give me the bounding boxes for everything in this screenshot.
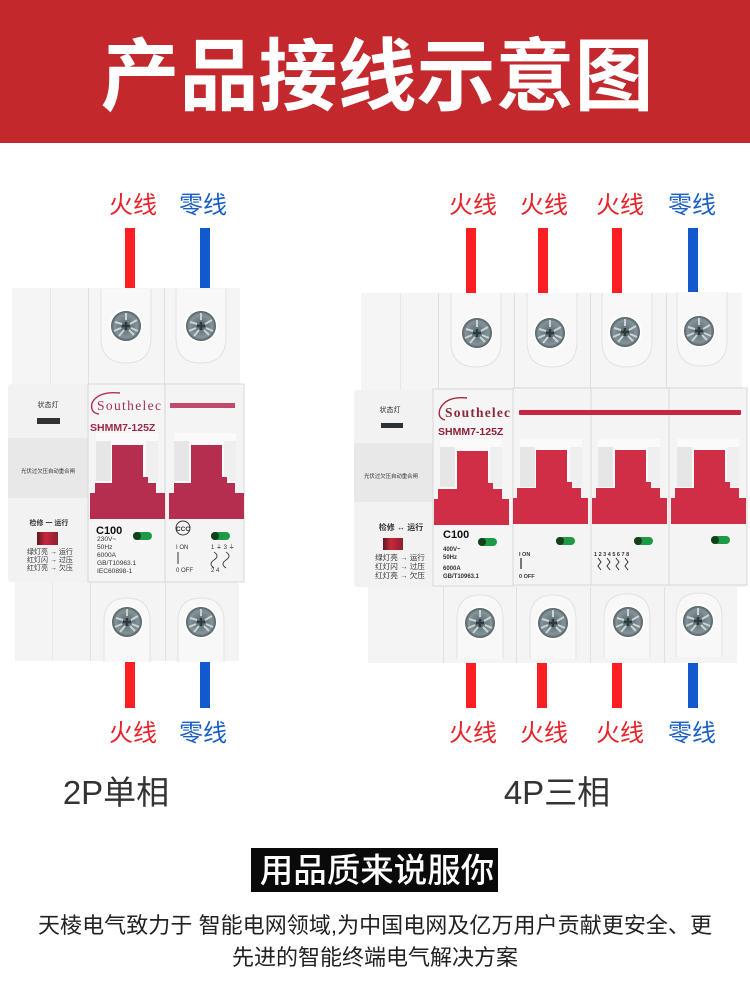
- module labels: 红灯闪 → 过压: [27, 555, 73, 564]
- module labels: 检修 一 运行: [30, 518, 68, 527]
- module labels: 1 2 3 4 5 6 7 8: [594, 552, 629, 558]
- toggle handles: [434, 450, 746, 525]
- screws: [109, 309, 218, 639]
- toggle handles: [90, 445, 244, 519]
- wires top: [125, 228, 698, 294]
- module labels: 光伏过欠压自动重合闸: [21, 467, 75, 475]
- module labels: [21, 400, 235, 575]
- module labels: 230V~: [97, 536, 116, 543]
- module labels: 检修 ↔ 运行: [379, 522, 423, 532]
- module labels: 2 4: [211, 568, 220, 574]
- wire labels top 2P: [109, 192, 227, 219]
- module labels: CCC: [176, 526, 190, 533]
- Southelec logo: [438, 398, 510, 438]
- wire labels bottom 2P: [109, 720, 227, 747]
- caption 2P: 2P单相: [63, 774, 169, 811]
- Southelec logo: [90, 393, 161, 434]
- wire labels top 4P: [449, 192, 716, 219]
- slogan bar: 用品质来说服你: [260, 853, 494, 890]
- module labels: 6000A: [443, 566, 461, 572]
- module labels: 50Hz: [443, 555, 457, 561]
- red stripe: [519, 410, 741, 415]
- module labels: [364, 405, 629, 580]
- Southelec logo: SHMM7-125Z: [90, 422, 156, 434]
- module labels: 红灯闪 → 过压: [375, 561, 425, 571]
- module labels: 光伏过欠压自动重合闸: [364, 472, 418, 480]
- red stripe: [170, 403, 235, 408]
- description: [38, 913, 712, 970]
- wire labels top 2P: 火线: [109, 192, 157, 219]
- module labels: GB/T10963.1: [443, 574, 480, 580]
- wire labels bottom 4P: 火线: [520, 720, 568, 747]
- body: [354, 390, 747, 587]
- Southelec logo: Southelec: [97, 398, 161, 413]
- wire labels bottom 2P: 零线: [179, 720, 227, 747]
- wire labels bottom 2P: 火线: [109, 720, 157, 747]
- module labels: I ON: [176, 545, 188, 551]
- module labels: C100: [96, 525, 122, 537]
- description: 先进的智能终端电气解决方案: [232, 945, 518, 970]
- module labels: 1 ⏚ 3 ⏚: [211, 544, 235, 551]
- module labels: C100: [443, 529, 469, 541]
- title: 产品接线示意图: [100, 32, 654, 121]
- module labels: IEC60898-1: [97, 568, 133, 575]
- 2P breaker: [8, 288, 244, 662]
- wire labels top 4P: 零线: [668, 192, 716, 219]
- module labels: 状态灯: [380, 405, 400, 414]
- screws: [460, 314, 716, 640]
- module labels: 50Hz: [97, 544, 112, 551]
- wire labels bottom 4P: 火线: [449, 720, 497, 747]
- wire labels bottom 4P: [449, 720, 716, 747]
- Southelec logo: SHMM7-125Z: [438, 426, 504, 438]
- 4P breaker: [354, 292, 747, 663]
- wire labels top 2P: 零线: [179, 192, 227, 219]
- status LEDs: [478, 536, 730, 546]
- module labels: 6000A: [97, 552, 117, 559]
- module labels: I ON: [519, 552, 530, 558]
- module labels: 0 OFF: [176, 568, 193, 574]
- wire labels top 4P: 火线: [596, 192, 644, 219]
- module labels: 400V~: [443, 547, 461, 553]
- status LEDs: [133, 532, 230, 540]
- wires bottom: [125, 660, 698, 708]
- wire labels top 4P: 火线: [449, 192, 497, 219]
- module labels: 0 OFF: [519, 574, 535, 580]
- title banner: [0, 0, 750, 143]
- wire labels bottom 4P: 零线: [668, 720, 716, 747]
- description: 天棱电气致力于 智能电网领域,为中国电网及亿万用户贡献更安全、更: [38, 913, 712, 938]
- caption 4P: 4P三相: [504, 774, 610, 811]
- module labels: 绿灯亮 → 运行: [27, 547, 73, 556]
- module labels: 红灯亮 → 欠压: [375, 570, 425, 580]
- body: [8, 384, 244, 582]
- module labels: GB/T10963.1: [97, 560, 137, 567]
- module labels: 绿灯亮 → 运行: [375, 552, 425, 562]
- wire labels top 4P: 火线: [520, 192, 568, 219]
- Southelec logo: Southelec: [445, 405, 510, 420]
- module labels: 红灯亮 → 欠压: [27, 563, 73, 572]
- module labels: 状态灯: [38, 400, 58, 409]
- wire labels bottom 4P: 火线: [596, 720, 644, 747]
